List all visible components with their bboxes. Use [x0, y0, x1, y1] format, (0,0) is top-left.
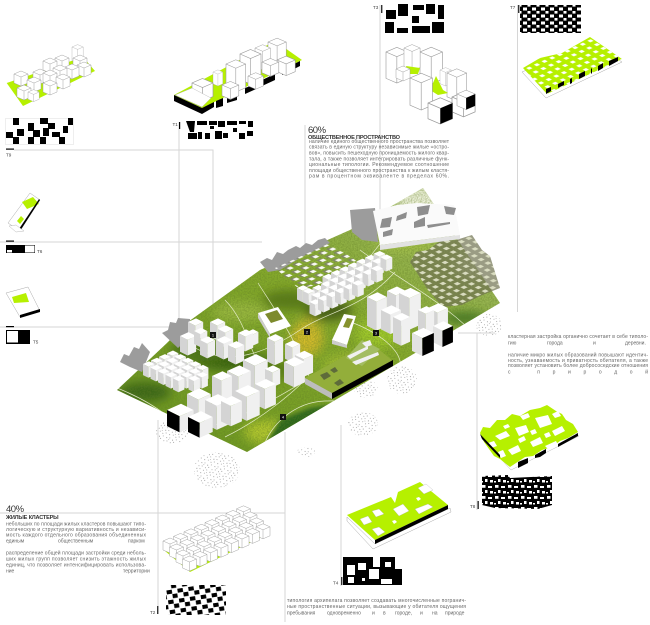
- isometric masterplan site: [117, 188, 500, 452]
- zone marker 3: [373, 330, 379, 336]
- T7 label: T7: [510, 5, 516, 10]
- slender courtyard building, centre: [332, 314, 356, 348]
- T6 axonometric: [8, 193, 40, 232]
- text block: archipelago typology: одновременно: [327, 610, 361, 616]
- typology T8: [470, 405, 579, 509]
- grey cast shadows: [120, 208, 378, 372]
- zone marker 1: 1: [212, 332, 215, 338]
- T1 axonometric: [174, 38, 302, 114]
- heading 40%: 40%: [6, 504, 25, 515]
- zone marker 2: [304, 329, 310, 335]
- body text: [309, 139, 450, 180]
- body text: единым: [6, 538, 25, 544]
- large white blocks, bottom group: [167, 334, 313, 438]
- body text: циональные типологии. Рекомендуемое соотношение: [309, 162, 449, 168]
- zone marker 3: 3: [375, 330, 378, 336]
- T6 plan and label: T6: [37, 249, 43, 254]
- heading 60%: 60%: [308, 125, 327, 136]
- large courtyard building, top: [373, 203, 460, 250]
- typology T7: [510, 5, 622, 98]
- text block: cluster development: с природой: [508, 368, 648, 376]
- text block: cluster development: наличие микро жилых образований повышают идентич-: [508, 352, 648, 358]
- text block: archipelago typology: и: [420, 610, 423, 616]
- typology T4: [333, 482, 451, 586]
- T2 label: T2: [150, 610, 156, 615]
- text block: 40% housing clusters: [5, 504, 150, 574]
- T4 label: T4: [333, 580, 339, 586]
- subheading: ОБЩЕСТВЕННОЕ ПРОСТРАНСТВО: [308, 135, 401, 141]
- text block: archipelago typology: на: [432, 610, 438, 616]
- text block: cluster development: ность, узнаваемость и приватность обитателя, а также: [508, 358, 648, 364]
- body text: парком: [128, 538, 145, 544]
- text block: cluster development: города: [547, 340, 563, 346]
- T1 plan: [186, 121, 253, 139]
- zone marker 1: [210, 332, 216, 338]
- typology T6: [6, 193, 43, 254]
- typology T1: [172, 38, 302, 139]
- front-left small cluster: [143, 350, 208, 392]
- back cluster: small housing grid: [275, 243, 358, 288]
- T7 plan: [520, 5, 581, 33]
- text block: cluster development: [508, 333, 648, 376]
- tall blocks, right group: [367, 286, 453, 356]
- zone marker 2: 2: [306, 330, 309, 334]
- leader lines: [0, 5, 518, 622]
- T8 plan: [482, 475, 552, 509]
- text block: cluster development: деревни.: [625, 340, 646, 346]
- text block: archipelago typology: типология архипелага позволяет создавать многочисленные погранич-: [287, 598, 466, 604]
- text block: 60% public space: [308, 125, 450, 180]
- T9 label: T9: [6, 152, 12, 158]
- right cluster: olive housing grid: [410, 235, 500, 307]
- T2 axonometric: [163, 506, 270, 572]
- text block: archipelago typology: природе: [445, 610, 465, 616]
- text block: cluster development: позволяет установить более добрососедские отношения: [508, 363, 648, 369]
- zone marker 4: [280, 414, 286, 420]
- body text: наличие единого общественного пространства позволяет: [309, 139, 450, 145]
- cluster of mid-sized blocks: [180, 318, 258, 365]
- T9 plan: [6, 118, 74, 144]
- body text: общественным: [58, 538, 94, 544]
- text block: archipelago typology: и: [372, 610, 375, 616]
- T2 plan: [166, 585, 226, 615]
- green-roof block with black edge: [305, 340, 393, 399]
- text block: archipelago typology: [287, 598, 466, 616]
- body text: связать в единую структуру независимые жилые «остро-: [309, 145, 449, 151]
- typology T9: [6, 45, 95, 158]
- T8 axonometric: [480, 405, 579, 470]
- body text: небольших по площади жилых кластеров повышают типо-: [6, 522, 146, 528]
- T1 label: T1: [172, 122, 178, 127]
- text block: cluster development: и: [593, 340, 596, 346]
- T3 label: T3: [373, 5, 379, 10]
- text block: cluster development: кластерная застройка органично сочетает в себе типоло-: [508, 333, 648, 340]
- ground: green landscape: [117, 188, 500, 452]
- body text: рам в процентном эквиваленте в пределах 60%.: [309, 174, 449, 180]
- T5 axonometric: [6, 287, 40, 318]
- T7 axonometric: [522, 37, 622, 98]
- body text: логическую и структурную вариативность и независи-: [6, 527, 146, 533]
- body text: территории: [123, 568, 150, 574]
- subheading: ЖИЛЫЕ КЛАСТЕРЫ: [5, 515, 59, 521]
- typology T5: [6, 287, 40, 344]
- T8 label: T8: [470, 504, 476, 509]
- T3 axonometric: [386, 45, 475, 124]
- text block: archipelago typology: ные пространственные ситуации, вызывающие у обитателя ощущения: [287, 604, 466, 610]
- centre front grid of white houses: [297, 251, 392, 316]
- text block: archipelago typology: городе,: [395, 610, 412, 616]
- body text: вов», повысить пешеходную проницаемость жилого квар-: [309, 150, 449, 156]
- body text: площади общественного пространства к жилым кластя-: [309, 168, 449, 174]
- body text: распределение общей площади застройки среди неболь-: [6, 550, 146, 556]
- typology T3: [373, 4, 475, 124]
- T5 plan and label: T5: [33, 340, 39, 344]
- T3 plan: [385, 4, 444, 33]
- body text: ние: [6, 568, 15, 574]
- body text: [6, 522, 150, 574]
- T4 plan: [343, 557, 402, 585]
- T4 axonometric: [347, 482, 451, 549]
- courtyard building, centre left: [258, 307, 291, 338]
- text block: archipelago typology: пребывания: [287, 610, 316, 616]
- body text: мость каждого отдельного образования объединенных: [6, 532, 146, 538]
- body text: тала, а также позволяет интегрировать различные функ-: [309, 156, 449, 162]
- stipple: dots under the site: [156, 314, 502, 488]
- body text: единиц, что позволяет интенсифицировать использова-: [6, 562, 146, 568]
- body text: ших жилых групп позволяет снизить этажность жилых: [6, 556, 146, 562]
- typology T2: [150, 506, 270, 615]
- T9 axonometric: [7, 45, 95, 106]
- zone marker 4: 4: [282, 414, 285, 420]
- text block: archipelago typology: в: [383, 610, 386, 616]
- text block: cluster development: гию: [508, 340, 517, 346]
